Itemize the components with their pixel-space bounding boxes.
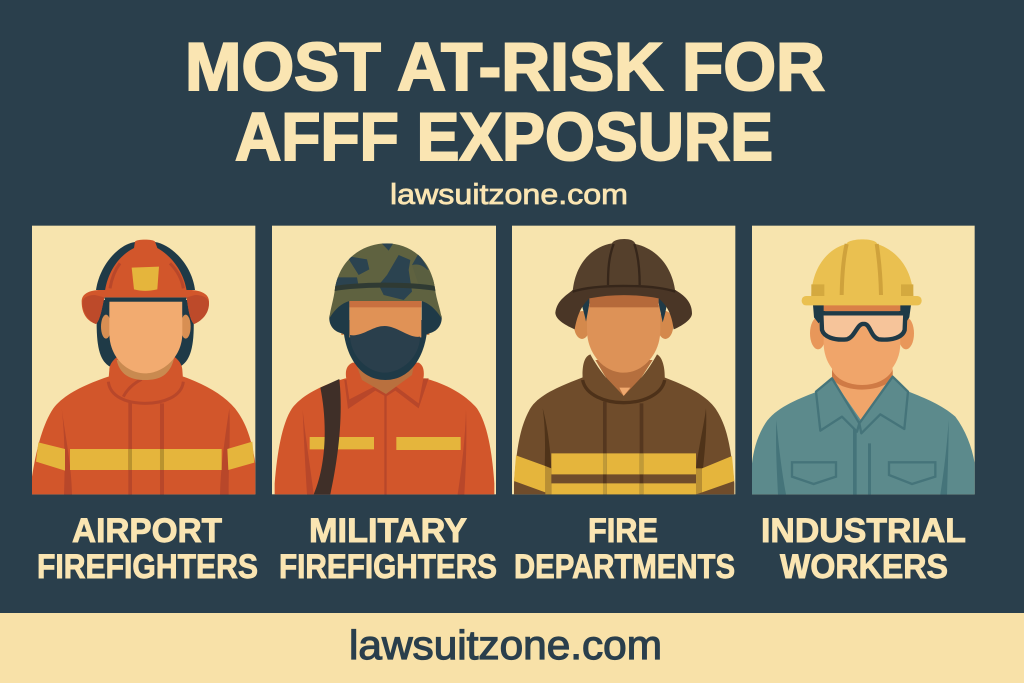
title: MOST AT-RISK FOR	[185, 29, 825, 105]
website subtitle: lawsuitzone.com	[390, 179, 628, 211]
label: fire departments: DEPARTMENTS	[514, 548, 735, 586]
balaclava and face	[343, 300, 428, 380]
label: industrial workers: INDUSTRIAL	[761, 512, 966, 550]
panel: fire department firefighter	[512, 226, 735, 494]
footer website: lawsuitzone.com	[349, 622, 662, 668]
panel: military firefighter	[272, 226, 496, 494]
label: airport firefighters: AIRPORT	[72, 512, 222, 550]
face	[587, 305, 660, 373]
collar	[583, 354, 665, 403]
title: AFFF EXPOSURE	[235, 99, 773, 175]
shoulder strap	[314, 379, 341, 494]
helmet	[325, 240, 445, 337]
label: fire departments: FIRE	[588, 512, 658, 550]
uniform	[275, 378, 494, 494]
label: fire departments	[514, 512, 735, 586]
label: military firefighters: FIREFIGHTERS	[279, 548, 497, 586]
panel: airport firefighter	[32, 226, 255, 494]
shirt collar	[816, 377, 908, 433]
face	[824, 306, 900, 384]
title	[185, 29, 825, 175]
panel: industrial worker	[752, 226, 975, 494]
collar	[344, 363, 429, 409]
ears	[341, 322, 430, 335]
face	[109, 302, 182, 373]
helmet	[82, 240, 209, 324]
helmet	[555, 239, 692, 329]
shirt pockets	[792, 462, 935, 484]
helmet badge	[132, 267, 159, 291]
face mask	[350, 326, 420, 373]
hard hat	[802, 239, 922, 305]
label: airport firefighters	[37, 512, 258, 586]
safety goggles	[813, 305, 911, 340]
label: military firefighters: MILITARY	[309, 512, 467, 550]
hair	[581, 298, 667, 322]
ears	[810, 317, 914, 349]
ears	[574, 311, 673, 339]
label: military firefighters	[279, 512, 497, 586]
turnout coat	[514, 377, 734, 494]
ears	[101, 315, 191, 339]
label: industrial workers	[761, 512, 966, 586]
label: airport firefighters: FIREFIGHTERS	[37, 548, 258, 586]
neck	[832, 368, 893, 422]
footer band	[0, 613, 1024, 683]
collar	[108, 356, 183, 403]
label: industrial workers: WORKERS	[780, 548, 948, 586]
jacket	[32, 377, 255, 494]
hair	[97, 300, 194, 367]
work shirt	[752, 377, 975, 494]
